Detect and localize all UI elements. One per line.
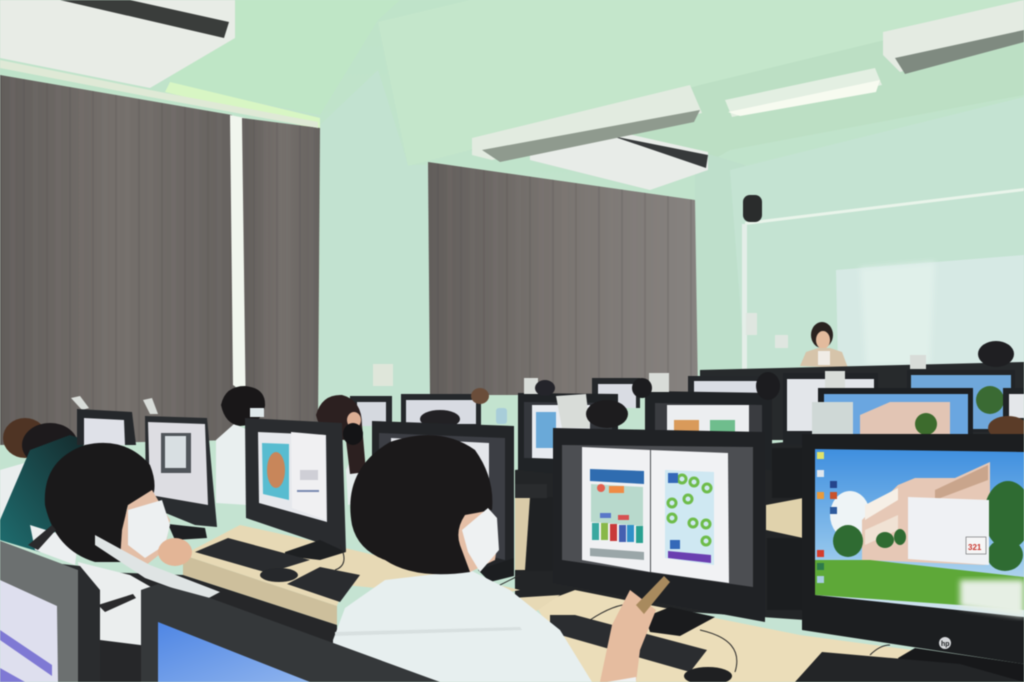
hair: [350, 435, 492, 574]
window gap: [230, 115, 248, 395]
keyboards and mice: left desk: [195, 538, 360, 602]
curtain: centre: [428, 162, 698, 395]
hand: [158, 538, 192, 566]
left page infographic: [590, 469, 644, 560]
mouse: centre: [684, 667, 732, 682]
back row: dark desk band: [700, 362, 1024, 440]
middle-row dark furniture: [515, 448, 805, 610]
monitor: back 7: [1003, 388, 1024, 420]
curtain: far left: [0, 75, 236, 445]
desk: right section: [480, 590, 1024, 682]
monitor: behind foreground student: [372, 421, 514, 582]
monitor stand: centre: [645, 607, 715, 636]
middle dark area behind desks: [515, 440, 805, 620]
cables: [335, 545, 890, 672]
air conditioner: centre: [530, 130, 708, 190]
air conditioner: left: [0, 0, 318, 128]
face mask: [128, 500, 170, 558]
monitor: back 3: [592, 378, 640, 408]
right foreground student: [333, 435, 670, 682]
monitor: row 1 far left small: [77, 409, 136, 445]
ceiling light panel: right: [725, 68, 882, 117]
strap: [95, 535, 220, 600]
monitor: back 5: [783, 373, 878, 445]
keyboard: centre: [550, 615, 707, 672]
students behind monitors: centre: [420, 372, 780, 428]
desktop icons: [817, 452, 837, 583]
media player icon with numbers: [966, 537, 986, 554]
foreground monitor: bottom left: [0, 541, 100, 682]
wallpaper trees: [833, 481, 1024, 571]
monitor stand: right: [898, 648, 1024, 682]
face: [120, 490, 170, 570]
face mask: [462, 508, 499, 572]
ceiling light panel: centre: [472, 85, 702, 162]
dialog box on desktop: [908, 497, 989, 565]
person with black cap at back: [978, 341, 1024, 440]
right page infographic: [665, 470, 714, 565]
wall switch panels: [373, 313, 788, 386]
bag strap: [98, 594, 136, 612]
whiteboard: [836, 255, 1024, 368]
monitor: right foreground with campus wallpaper: [802, 434, 1024, 664]
left foreground student: [28, 443, 220, 646]
wallpaper lawn: [815, 560, 1024, 610]
monitor: row 2 centre left: [518, 393, 618, 480]
wallpaper cloud: [830, 491, 870, 539]
foreground monitor: bottom centre: [141, 584, 440, 682]
wallpaper building: [862, 462, 990, 565]
back row monitors: [350, 370, 1024, 445]
media player icon with numbers: 321: [968, 543, 982, 552]
ceiling light panel: top right: [883, 0, 1024, 74]
curtain: second left: [242, 118, 320, 425]
shirt: [78, 562, 165, 646]
monitor: back 1: [350, 396, 392, 426]
shirt: [333, 570, 592, 682]
desk: left section: [100, 525, 520, 682]
student in white shirt: [216, 386, 265, 505]
monitor: student's infographic page: [245, 418, 346, 560]
teacher at the front: [800, 322, 848, 368]
phone: [636, 576, 670, 614]
paper notes on monitors: [71, 355, 926, 428]
arm and hand: [600, 590, 656, 682]
HP logo: hp: [941, 641, 950, 648]
student with black mask: [316, 395, 366, 505]
face: [450, 505, 498, 572]
monitor: back 2: [401, 394, 481, 426]
speaker: [743, 195, 762, 222]
HP logo: [939, 637, 951, 649]
monitor: row 1 left: [145, 416, 217, 540]
monitor: back 4: [688, 376, 765, 400]
back-left students: [0, 418, 85, 565]
monitor: row 2 centre right: [645, 391, 772, 470]
hair: [45, 443, 155, 562]
monitor: desktop photo: [812, 388, 973, 438]
keyboard: right: [795, 652, 1024, 682]
monitor: back 6: [907, 370, 1015, 432]
monitor: centre foreground with book spread: [553, 428, 765, 622]
